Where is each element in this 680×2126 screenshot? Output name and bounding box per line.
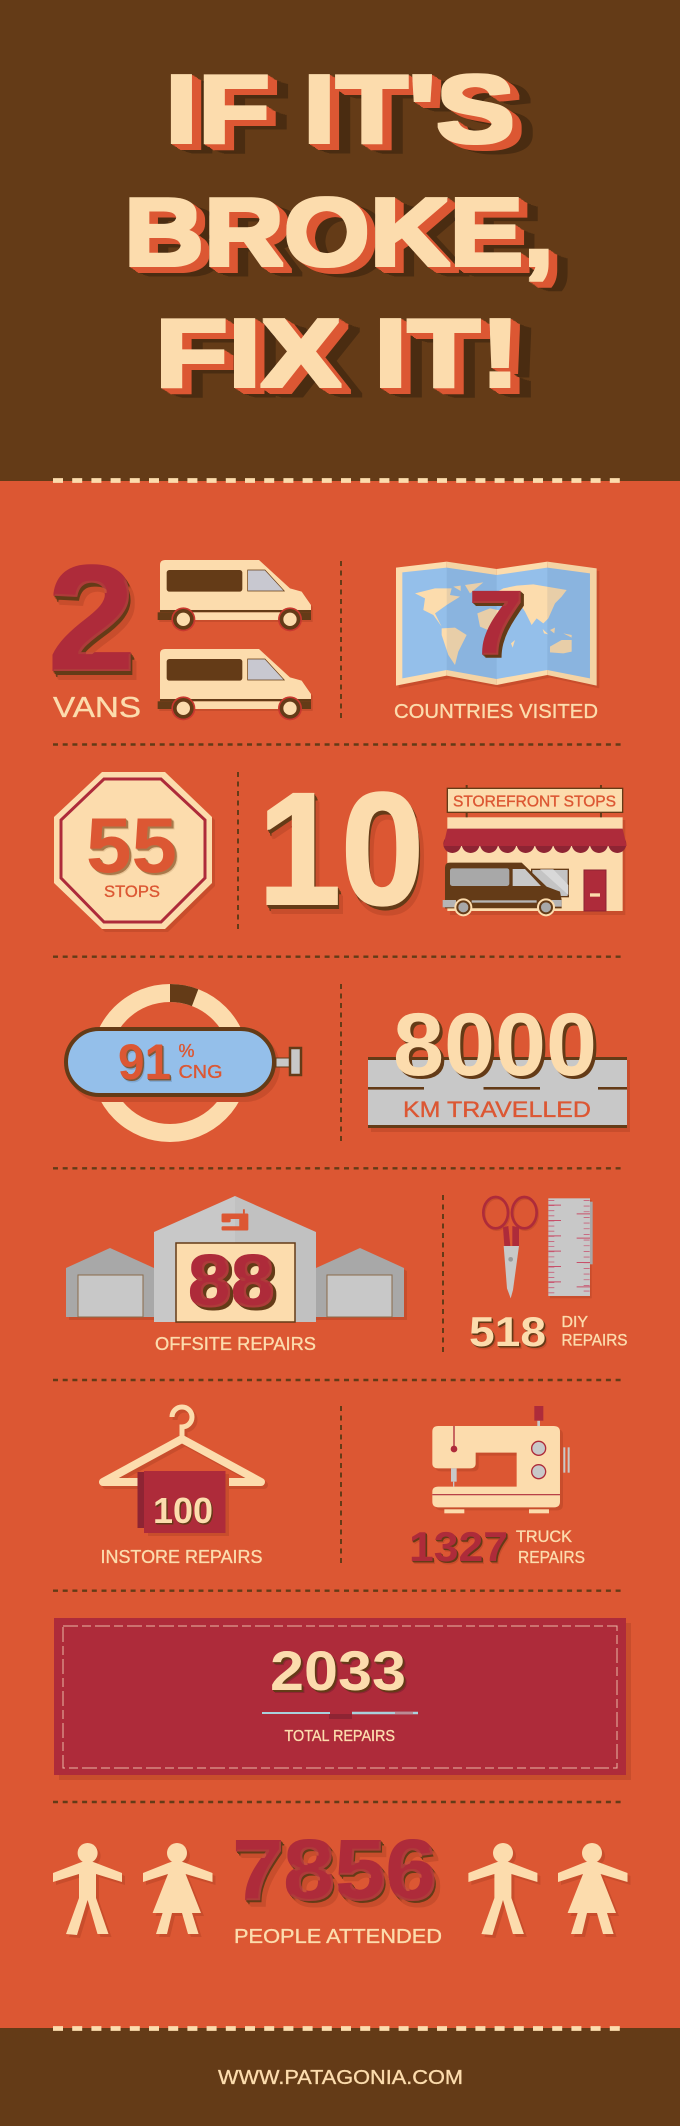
icon: woman right [558,1843,630,1937]
number 88: 88 [188,1242,274,1322]
stat: 91% CNG tank [66,984,301,1133]
stat: 10 storefront stops [258,759,627,938]
icon: gas tank [66,1029,301,1102]
number 518: 518 [469,1308,546,1355]
icon: folded world map [396,562,599,688]
icon: ruler [548,1198,593,1298]
icon: man right [468,1843,540,1938]
number 10: 10 [258,759,424,938]
icon: small sewing machine [222,1209,248,1231]
title: FIX IT! [155,300,520,407]
icon: woman left [143,1843,216,1937]
number 7: 7 [469,574,524,674]
icon: towel [138,1471,229,1536]
stat: 7856 people attended [53,1823,630,1948]
label vans: VANS [53,692,141,724]
stat: 88 offsite repairs [66,1196,407,1354]
sign text: STOREFRONT STOPS [453,794,616,810]
label repairs: REPAIRS [518,1547,585,1567]
icon: hanger [103,1407,264,1485]
number 55: 55 [86,801,177,889]
title: BROKE, [124,179,554,286]
title: IF IT'S [165,56,515,163]
stat: 7 countries visited [394,562,599,723]
stat: 8000 km travelled [368,994,630,1132]
label repairs: REPAIRS [562,1332,628,1350]
number 91: 91 [118,1034,171,1090]
stat: 100 instore repairs [100,1407,264,1567]
stat: 55 stops sign [54,772,215,932]
stat: 1327 truck repairs [409,1406,585,1570]
number 8000: 8000 [393,994,597,1094]
percent sign: % [178,1041,194,1061]
header band [0,0,680,481]
label offsite repairs: OFFSITE REPAIRS [155,1333,316,1354]
label truck: TRUCK [516,1528,572,1546]
icon: van top [158,560,313,631]
icon: van bottom [158,649,313,720]
label stops: STOPS [104,883,160,901]
number 100: 100 [153,1490,213,1531]
label people attended: PEOPLE ATTENDED [234,1925,442,1948]
footer url: WWW.PATAGONIA.COM [218,2066,463,2089]
icon: scissors [483,1197,538,1298]
number 2: 2 [48,534,136,702]
stat: 2 vans [48,534,313,724]
number 7856: 7856 [233,1823,437,1917]
icon: warehouse [66,1196,407,1322]
donut chart [100,984,240,1133]
label countries visited: COUNTRIES VISITED [394,700,598,723]
icon: octagon sign [54,772,215,932]
label diy: DIY [562,1314,588,1331]
icon: road [368,1057,630,1132]
title [124,56,554,407]
number 1327: 1327 [409,1523,508,1570]
panel: total repairs [54,1618,631,1780]
footer band [0,2028,680,2126]
icon: storefront [443,785,627,916]
label cng: CNG [178,1062,222,1082]
stat: 518 diy repairs [469,1197,628,1355]
label km travelled: KM TRAVELLED [403,1097,591,1122]
icon: sewing machine [432,1406,570,1513]
label instore repairs: INSTORE REPAIRS [100,1546,262,1567]
label total repairs: TOTAL REPAIRS [284,1728,395,1745]
icon: needle [262,1713,418,1719]
number 2033: 2033 [270,1639,406,1702]
icon: man left [53,1843,125,1938]
